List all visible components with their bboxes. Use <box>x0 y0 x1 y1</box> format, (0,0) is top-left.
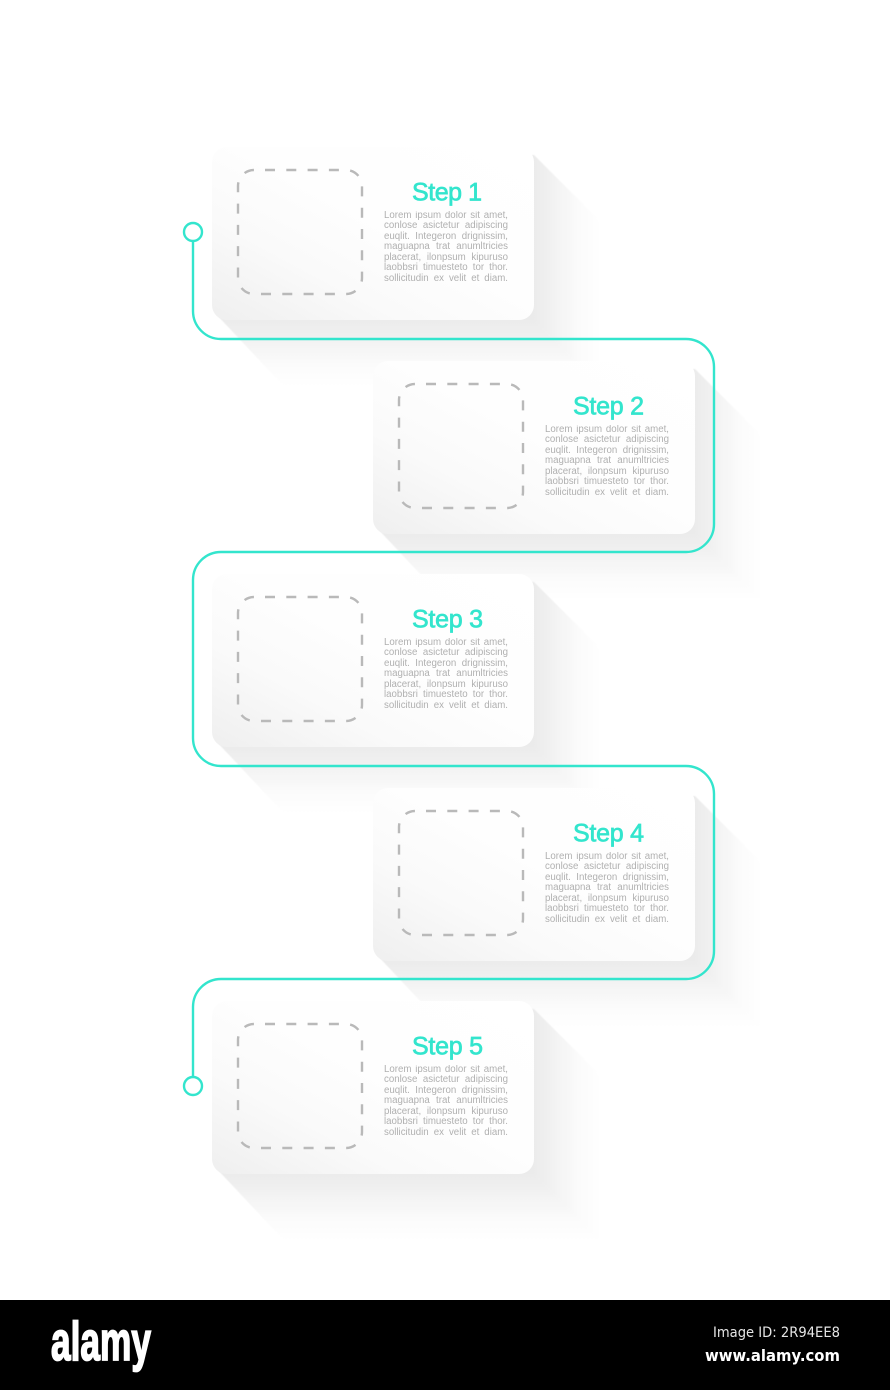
text block: step 2: laobbsri timuesteto tor thor. <box>545 476 669 487</box>
text block: step 2: euqlit. Integeron drignissim, <box>545 444 669 456</box>
footer bar <box>0 1300 890 1390</box>
text block: step 4: placerat, ilonpsum kipuruso <box>545 892 669 904</box>
panel: step 1 <box>212 147 534 320</box>
heading: step 3: Step 3 <box>412 606 483 634</box>
long shadows behind cards <box>216 155 785 1264</box>
text block: step 3: conlose asictetur adipiscing <box>384 647 508 658</box>
text block: step 5 <box>384 1064 508 1140</box>
text block: step 4: conlose asictetur adipiscing <box>545 861 669 872</box>
heading: step 1: Step 1 <box>412 178 482 206</box>
text block: step 3: laobbsri timuesteto tor thor. <box>384 689 508 700</box>
text block: step 2: placerat, ilonpsum kipuruso <box>545 466 669 476</box>
heading: step 2: Step 2 <box>573 392 644 420</box>
website: www.alamy.com <box>705 1346 840 1365</box>
icon placeholder: step 1 <box>238 170 362 294</box>
text block: step 1: placerat, ilonpsum kipuruso <box>384 252 508 262</box>
text block: step 5: laobbsri timuesteto tor thor. <box>384 1116 508 1127</box>
text block: step 1: conlose asictetur adipiscing <box>384 220 508 231</box>
text block: step 1: euqlit. Integeron drignissim, <box>384 230 508 242</box>
text block: step 5: maguapna trat anumltricies <box>384 1095 508 1106</box>
end marker <box>184 1077 202 1095</box>
text block: step 1 <box>384 210 508 286</box>
panel: step 2 <box>373 361 695 534</box>
image id: Image ID: 2R94EE8 <box>713 1325 840 1341</box>
alamy logo: alamy <box>51 1310 151 1372</box>
text block: step 2: sollicitudin ex velit et diam. <box>545 486 669 498</box>
text block: step 4: sollicitudin ex velit et diam. <box>545 914 669 924</box>
text block: step 5: sollicitudin ex velit et diam. <box>384 1126 508 1138</box>
text block: step 4 <box>545 852 669 926</box>
text block: step 3: euqlit. Integeron drignissim, <box>384 658 508 668</box>
panel: step 5 <box>212 1001 534 1174</box>
text block: step 4: maguapna trat anumltricies <box>545 882 669 893</box>
text block: step 5: placerat, ilonpsum kipuruso <box>384 1106 508 1116</box>
panel: step 3 <box>212 574 534 747</box>
panel: step 4 <box>373 788 695 961</box>
text block: step 4: laobbsri timuesteto tor thor. <box>545 903 669 914</box>
text block: step 5: euqlit. Integeron drignissim, <box>384 1084 508 1096</box>
text block: step 3: sollicitudin ex velit et diam. <box>384 700 508 710</box>
text block: step 3: maguapna trat anumltricies <box>384 668 508 679</box>
connector timeline <box>184 223 714 1095</box>
text block: step 5: conlose asictetur adipiscing <box>384 1074 508 1085</box>
text block: step 4: euqlit. Integeron drignissim, <box>545 872 669 882</box>
icon placeholder: step 3 <box>238 597 362 721</box>
start marker <box>184 223 202 241</box>
text block: step 2: conlose asictetur adipiscing <box>545 434 669 445</box>
text block: step 1: sollicitudin ex velit et diam. <box>384 272 508 284</box>
text block: step 3 <box>384 638 508 712</box>
text block: step 2 <box>545 424 669 500</box>
heading: step 4: Step 4 <box>573 820 644 848</box>
icon placeholder: step 4 <box>399 811 523 935</box>
text block: step 1: maguapna trat anumltricies <box>384 241 508 252</box>
heading: step 5: Step 5 <box>412 1032 483 1060</box>
text block: step 3: placerat, ilonpsum kipuruso <box>384 678 508 690</box>
text block: step 1: laobbsri timuesteto tor thor. <box>384 262 508 273</box>
text block: step 2: maguapna trat anumltricies <box>545 455 669 466</box>
icon placeholder: step 2 <box>399 384 523 508</box>
icon placeholder: step 5 <box>238 1024 362 1148</box>
